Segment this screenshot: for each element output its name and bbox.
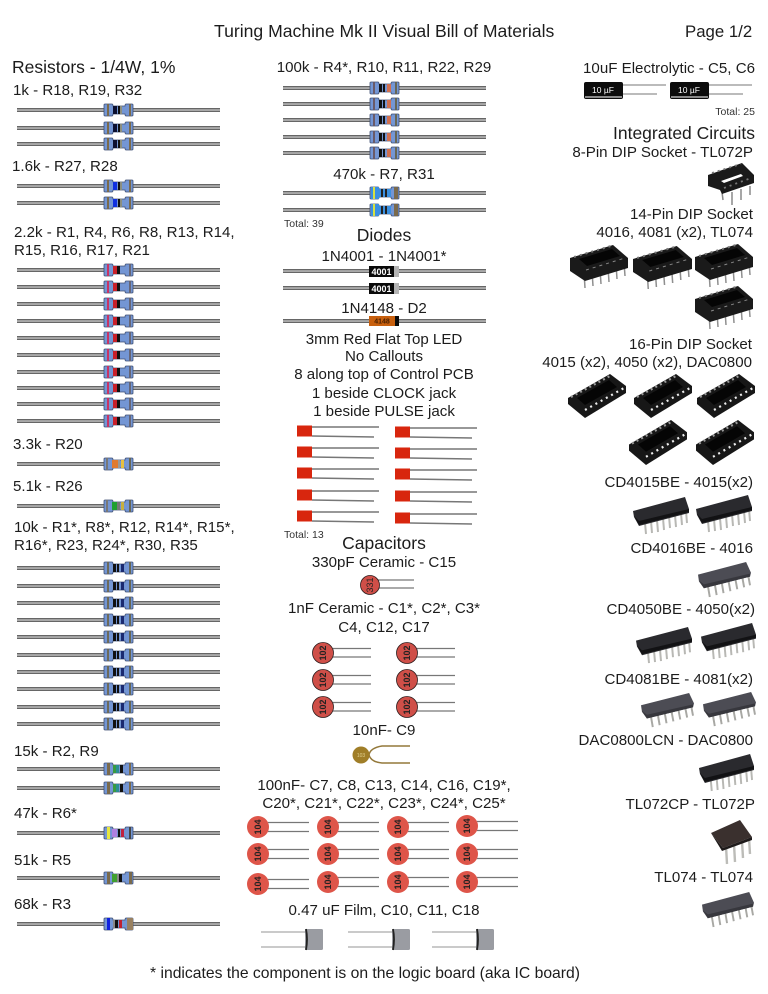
100nF capacitors: 100nF- C7, C8, C13, C14, C16, C19*,: [257, 777, 511, 794]
47k resistor: 47k - R6*: [14, 805, 77, 822]
10nF capacitor: 10nF- C9: [353, 722, 415, 739]
resistor total: Total: 39: [284, 218, 324, 230]
red LEDs: [297, 426, 477, 524]
2.2k resistors: R15, R16, R17, R21: [14, 242, 150, 259]
1N4001 diodes: 4001: [371, 267, 392, 277]
1N4148 diode: 4148: [374, 318, 390, 326]
14-pin sockets: 4016, 4081 (x2), TL074: [596, 224, 753, 241]
10k resistors: 10k - R1*, R8*, R12, R14*, R15*,: [14, 519, 235, 536]
16-pin sockets: [542, 336, 755, 465]
title: Turing Machine Mk II Visual Bill of Materials: [214, 21, 554, 41]
LED description: 3mm Red Flat Top LED: [306, 331, 462, 348]
470k resistors: 470k - R7, R31: [333, 166, 435, 183]
CD4016BE chip: CD4016BE - 4016: [630, 540, 753, 557]
1N4148 diode: [283, 300, 486, 326]
2.2k resistors: [14, 224, 235, 427]
CD4050BE chips: [606, 601, 756, 663]
100nF capacitors: [247, 777, 518, 895]
CD4015BE chips: [604, 474, 753, 534]
51k resistor: 51k - R5: [14, 852, 71, 869]
CD4016BE chip: [630, 540, 753, 597]
LED description: 8 along top of Control PCB: [294, 366, 474, 383]
10k resistors: [14, 519, 235, 730]
15k resistors: 15k - R2, R9: [14, 743, 99, 760]
diode total: Total: 13: [284, 529, 324, 541]
capacitor total: Total: 25: [715, 106, 755, 118]
CD4081BE chips: CD4081BE - 4081(x2): [604, 671, 753, 688]
100nF capacitors: C20*, C21*, C22*, C23*, C24*, C25*: [262, 795, 506, 812]
10nF capacitor: [352, 722, 415, 764]
1nF capacitors: [288, 600, 480, 718]
1.6k resistors: 1.6k - R27, R28: [12, 158, 118, 175]
TL072 chip: TL072CP - TL072P: [626, 796, 755, 813]
TL074 chip: [654, 869, 754, 927]
panel: diodes: [283, 225, 486, 541]
panel: resistors: [12, 57, 491, 930]
LED description: [294, 331, 474, 420]
TL074 chip: TL074 - TL074: [654, 869, 753, 886]
5.1k resistor: 5.1k - R26: [13, 478, 83, 495]
8-pin socket: 8-Pin DIP Socket - TL072P: [572, 144, 753, 161]
330pF capacitor: 331: [365, 577, 375, 593]
47k resistor: [14, 805, 220, 839]
DAC0800 chip: [578, 732, 754, 791]
CD4081BE chips: [604, 671, 756, 727]
14-pin sockets: [570, 206, 754, 329]
1nF capacitors: 1nF Ceramic - C1*, C2*, C3*: [288, 600, 480, 617]
330pF capacitor: 330pF Ceramic - C15: [312, 554, 456, 571]
1k resistors: 1k - R18, R19, R32: [13, 82, 142, 99]
electrolytic capacitors: [583, 60, 755, 99]
3.3k resistor: 3.3k - R20: [13, 436, 83, 453]
3.3k resistor: [13, 436, 220, 470]
10nF capacitor: 103: [357, 753, 365, 759]
10k resistors: R16*, R23, R24*, R30, R35: [14, 537, 198, 554]
68k resistor: 68k - R3: [14, 896, 71, 913]
1nF capacitors: C4, C12, C17: [338, 619, 430, 636]
1N4001 diodes: 1N4001 - 1N4001*: [321, 248, 447, 265]
2.2k resistors: 2.2k - R1, R4, R6, R8, R13, R14,: [14, 224, 235, 241]
page number: Page 1/2: [685, 22, 752, 41]
panel: integrated circuits: [542, 123, 756, 927]
LED description: No Callouts: [345, 348, 423, 365]
100k resistors: [277, 59, 491, 159]
14-pin sockets: 14-Pin DIP Socket: [630, 206, 754, 223]
1.6k resistors: [12, 158, 220, 209]
51k resistor: [14, 852, 220, 884]
CD4015BE chips: CD4015BE - 4015(x2): [604, 474, 753, 491]
1k resistors: [13, 82, 220, 150]
68k resistor: [14, 896, 220, 930]
100k resistors: 100k - R4*, R10, R11, R22, R29: [277, 59, 491, 76]
film capacitors: [261, 902, 494, 950]
panel: capacitors: [247, 60, 755, 950]
470k resistors: [283, 166, 486, 216]
16-pin sockets: 16-Pin DIP Socket: [629, 336, 753, 353]
5.1k resistor: [13, 478, 220, 512]
heading: integrated circuits: Integrated Circuits: [613, 123, 755, 143]
CD4050BE chips: CD4050BE - 4050(x2): [606, 601, 755, 618]
heading: capacitors: Capacitors: [342, 533, 426, 553]
heading: resistors: Resistors - 1/4W, 1%: [12, 57, 175, 77]
LED description: 1 beside PULSE jack: [313, 403, 455, 420]
15k resistors: [14, 743, 220, 794]
TL072 chip: [626, 796, 755, 864]
330pF capacitor: [312, 554, 456, 594]
footnote: * indicates the component is on the logic board (aka IC board): [150, 965, 580, 982]
1N4148 diode: 1N4148 - D2: [341, 300, 427, 317]
1N4001 diodes: [283, 248, 486, 294]
1N4001 diodes: 4001: [371, 284, 392, 294]
16-pin sockets: 4015 (x2), 4050 (x2), DAC0800: [542, 354, 752, 371]
film capacitors: 0.47 uF Film, C10, C11, C18: [288, 902, 480, 919]
DAC0800 chip: DAC0800LCN - DAC0800: [578, 732, 753, 749]
electrolytic capacitors: 10uF Electrolytic - C5, C6: [583, 60, 755, 77]
8-pin socket: [572, 144, 754, 205]
LED description: 1 beside CLOCK jack: [312, 385, 457, 402]
heading: diodes: Diodes: [357, 225, 411, 245]
